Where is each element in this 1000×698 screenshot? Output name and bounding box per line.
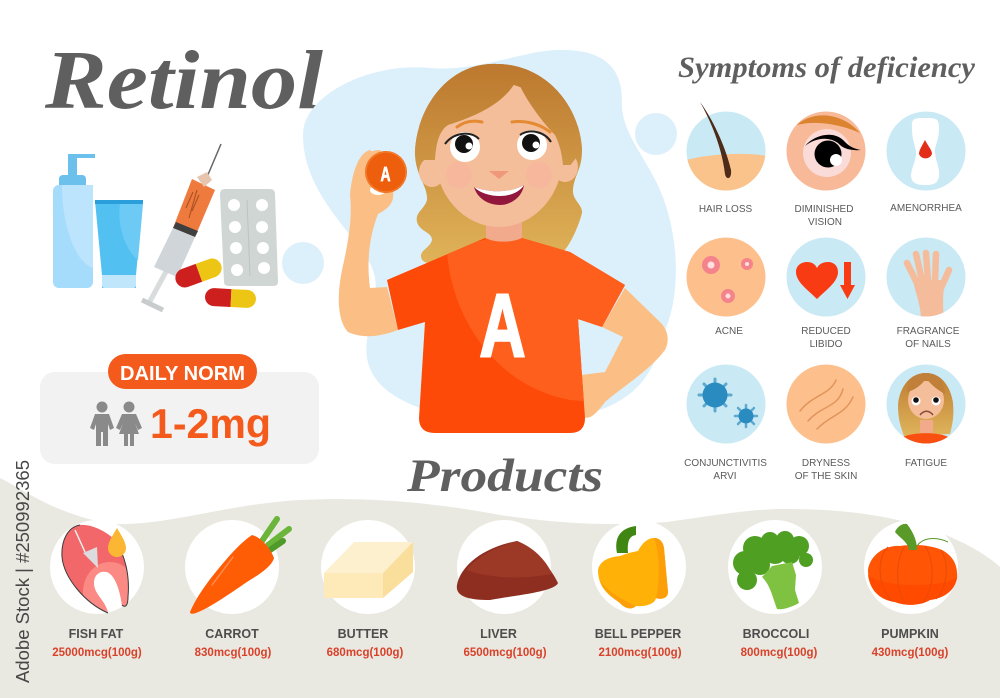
product: liver (457, 520, 558, 659)
symptom: conjunctivitis arvi: CONJUNCTIVITIS (684, 458, 767, 469)
symptom: dryness of the skin: DRYNESS (802, 458, 850, 469)
product: broccoli: 800mcg(100g) (741, 647, 818, 659)
icon: syringe (142, 144, 221, 310)
product: fish fat (50, 520, 144, 659)
product: butter: BUTTER (338, 627, 388, 641)
shirt letter A: A (480, 277, 526, 376)
character nose (489, 171, 509, 179)
product: pumpkin (864, 520, 958, 659)
product: fish fat: FISH FAT (69, 627, 124, 641)
vitamin A ball (365, 151, 407, 195)
badge: daily norm: DAILY NORM (120, 363, 245, 385)
icon: blister pack (220, 189, 278, 286)
character shirt (387, 238, 625, 433)
symptom: acne (686, 238, 766, 337)
symptom: diminished vision: VISION (808, 217, 842, 228)
product: carrot: 830mcg(100g) (195, 647, 272, 659)
vitamin A ball: A (380, 162, 390, 186)
product: broccoli: BROCCOLI (743, 627, 809, 641)
symptom: reduced libido (786, 238, 866, 350)
illustration: cosmetics and medicine (53, 144, 278, 310)
product: carrot: CARROT (205, 627, 259, 641)
product: pumpkin: PUMPKIN (881, 627, 939, 641)
product: bell pepper: BELL PEPPER (595, 627, 681, 641)
symptom: reduced libido: LIBIDO (810, 339, 843, 350)
panel: daily norm (40, 354, 319, 464)
symptom: hair loss: HAIR LOSS (699, 204, 752, 215)
character fringe (415, 64, 582, 165)
badge: daily norm (108, 354, 257, 389)
product: pumpkin: 430mcg(100g) (872, 647, 949, 659)
symptom: conjunctivitis arvi (684, 364, 767, 482)
symptom: fatigue: FATIGUE (905, 458, 947, 469)
text: dosage: 1-2mg (150, 400, 271, 447)
icon: capsule two (205, 288, 256, 308)
symptom: amenorrhea (886, 112, 966, 214)
heading: symptoms of deficiency: Symptoms of deficiency (678, 51, 976, 84)
icon: pump bottle (53, 154, 95, 288)
symptom: fragrance of nails: FRAGRANCE (897, 326, 960, 337)
product: carrot (185, 519, 289, 659)
icon: capsule one (173, 256, 224, 290)
icon: cream tube (95, 200, 143, 288)
character: girl holding vitamin A (339, 50, 668, 440)
character cheeks (446, 162, 552, 188)
character hair (415, 64, 582, 263)
symptom: amenorrhea: AMENORRHEA (890, 203, 962, 214)
symptom: conjunctivitis arvi: ARVI (713, 471, 737, 482)
product: butter (321, 520, 415, 659)
bubble: right (635, 113, 677, 155)
symptom: diminished vision: DIMINISHED (795, 204, 853, 215)
symptom: fatigue (886, 364, 966, 469)
symptom: reduced libido: REDUCED (801, 326, 851, 337)
symptom: fragrance of nails (886, 238, 966, 350)
product: liver: 6500mcg(100g) (463, 647, 547, 659)
bottom wave background (0, 478, 1000, 698)
character eyes (445, 130, 551, 162)
character brows (457, 121, 550, 132)
character ears (419, 152, 578, 187)
product: bell pepper: 2100mcg(100g) (598, 647, 682, 659)
product: fish fat: 25000mcg(100g) (52, 647, 142, 659)
character smile (474, 185, 524, 205)
character left arm (339, 150, 398, 336)
title: Retinol: Retinol (44, 34, 324, 127)
product: bell pepper (592, 520, 686, 659)
symptom: dryness of the skin: OF THE SKIN (795, 471, 857, 482)
character neck (486, 215, 522, 242)
symptom: fragrance of nails: OF NAILS (905, 339, 951, 350)
icon: man and woman (90, 402, 142, 446)
bubble: left (282, 242, 324, 284)
symptom: acne: ACNE (715, 326, 743, 337)
character right arm (568, 288, 668, 418)
symptom: diminished vision (786, 112, 866, 228)
stock credit vertical text: Adobe Stock | #250992365 (13, 460, 33, 683)
product: broccoli (728, 520, 822, 659)
product: butter: 680mcg(100g) (327, 647, 404, 659)
decorative blob behind character (282, 50, 677, 410)
character face (435, 83, 563, 227)
symptom: dryness of the skin (786, 364, 866, 482)
symptom: hair loss (686, 102, 767, 215)
heading: products: Products (406, 450, 603, 502)
character hand fingers (354, 150, 398, 196)
product: liver: LIVER (480, 627, 517, 641)
